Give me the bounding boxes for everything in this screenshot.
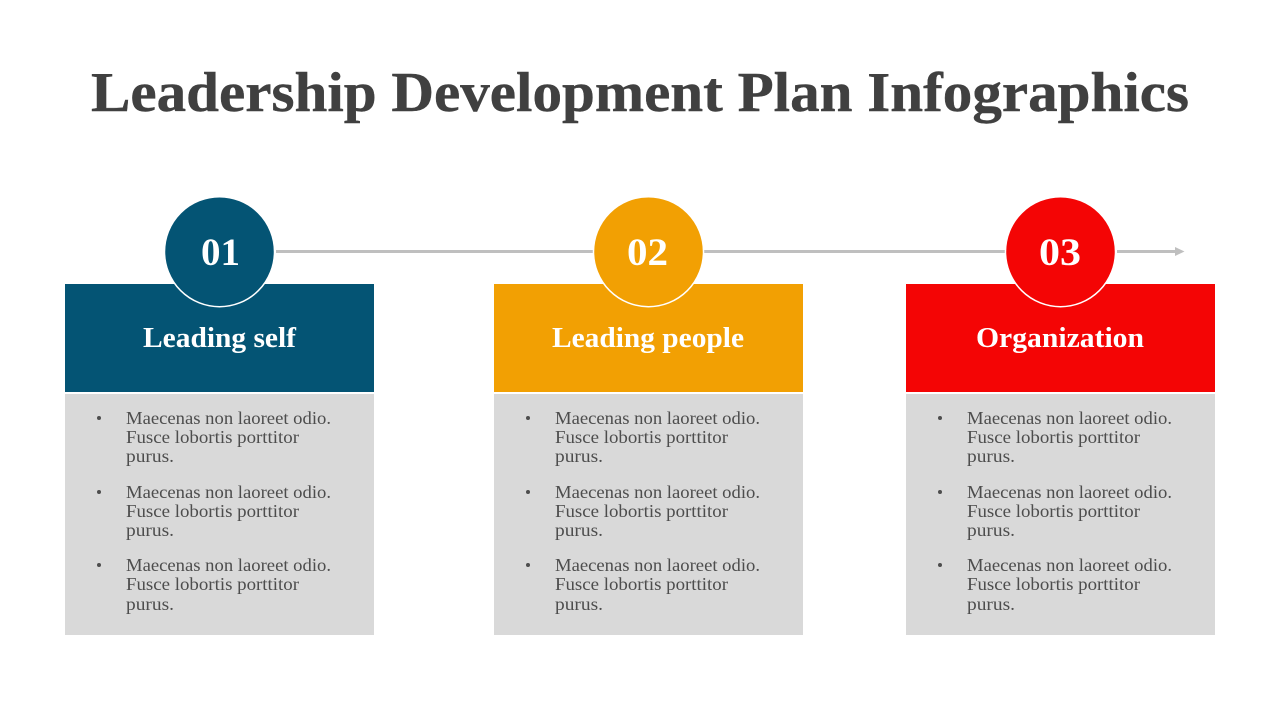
bullet list 2 — [526, 408, 760, 614]
number badge 3: 03 — [1039, 231, 1081, 274]
number badge 2: 02 — [627, 231, 668, 274]
bullet list 1 — [97, 408, 331, 614]
bullet list 3: Fusce lobortis porttitor — [967, 574, 1140, 594]
header block 2 — [494, 284, 803, 392]
panel: leading people — [494, 197, 803, 635]
number badge 2 — [594, 197, 704, 307]
panel: organization — [906, 197, 1215, 635]
bullet list 2: Fusce lobortis porttitor — [555, 427, 728, 447]
bullet list 2: purus. — [555, 446, 603, 466]
panel: leading self — [65, 197, 374, 635]
bullet list 3: Maecenas non laoreet odio. — [967, 555, 1172, 575]
bullet list 3 — [938, 408, 1172, 614]
bullet list 3: Fusce lobortis porttitor — [967, 427, 1140, 447]
heading 3: Organization — [976, 322, 1144, 354]
bullet list 2: purus. — [555, 520, 603, 540]
bullet list 1: Maecenas non laoreet odio. — [126, 482, 331, 502]
bullet list 3: purus. — [967, 594, 1015, 614]
heading 1: Leading self — [143, 322, 296, 354]
bullet list 1: Fusce lobortis porttitor — [126, 501, 299, 521]
bullet list 2: Maecenas non laoreet odio. — [555, 482, 760, 502]
header block 3 — [906, 284, 1215, 392]
bullet list 2: Maecenas non laoreet odio. — [555, 408, 760, 428]
number badge 1: 01 — [201, 231, 240, 274]
body block 2 — [494, 394, 803, 635]
bullet list 3: purus. — [967, 520, 1015, 540]
body block 3 — [906, 394, 1215, 635]
bullet list 3: Maecenas non laoreet odio. — [967, 482, 1172, 502]
bullet list 1: purus. — [126, 594, 174, 614]
bullet list 3: Maecenas non laoreet odio. — [967, 408, 1172, 428]
arrow: timeline connector — [276, 247, 1184, 256]
bullet list 3: purus. — [967, 446, 1015, 466]
bullet list 1: purus. — [126, 520, 174, 540]
bullet list 1: Maecenas non laoreet odio. — [126, 408, 331, 428]
bullet list 2: Fusce lobortis porttitor — [555, 574, 728, 594]
bullet list 1: purus. — [126, 446, 174, 466]
bullet list 1: Fusce lobortis porttitor — [126, 574, 299, 594]
number badge 3 — [1006, 197, 1116, 307]
number badge 1 — [164, 197, 274, 307]
bullet list 2: Fusce lobortis porttitor — [555, 501, 728, 521]
bullet list 2: Maecenas non laoreet odio. — [555, 555, 760, 575]
header block 1 — [65, 284, 374, 392]
body block 1 — [65, 394, 374, 635]
bullet list 3: Fusce lobortis porttitor — [967, 501, 1140, 521]
bullet list 1: Fusce lobortis porttitor — [126, 427, 299, 447]
title: Leadership Development Plan Infographics — [91, 62, 1189, 124]
heading 2: Leading people — [552, 322, 744, 354]
bullet list 2: purus. — [555, 594, 603, 614]
bullet list 1: Maecenas non laoreet odio. — [126, 555, 331, 575]
